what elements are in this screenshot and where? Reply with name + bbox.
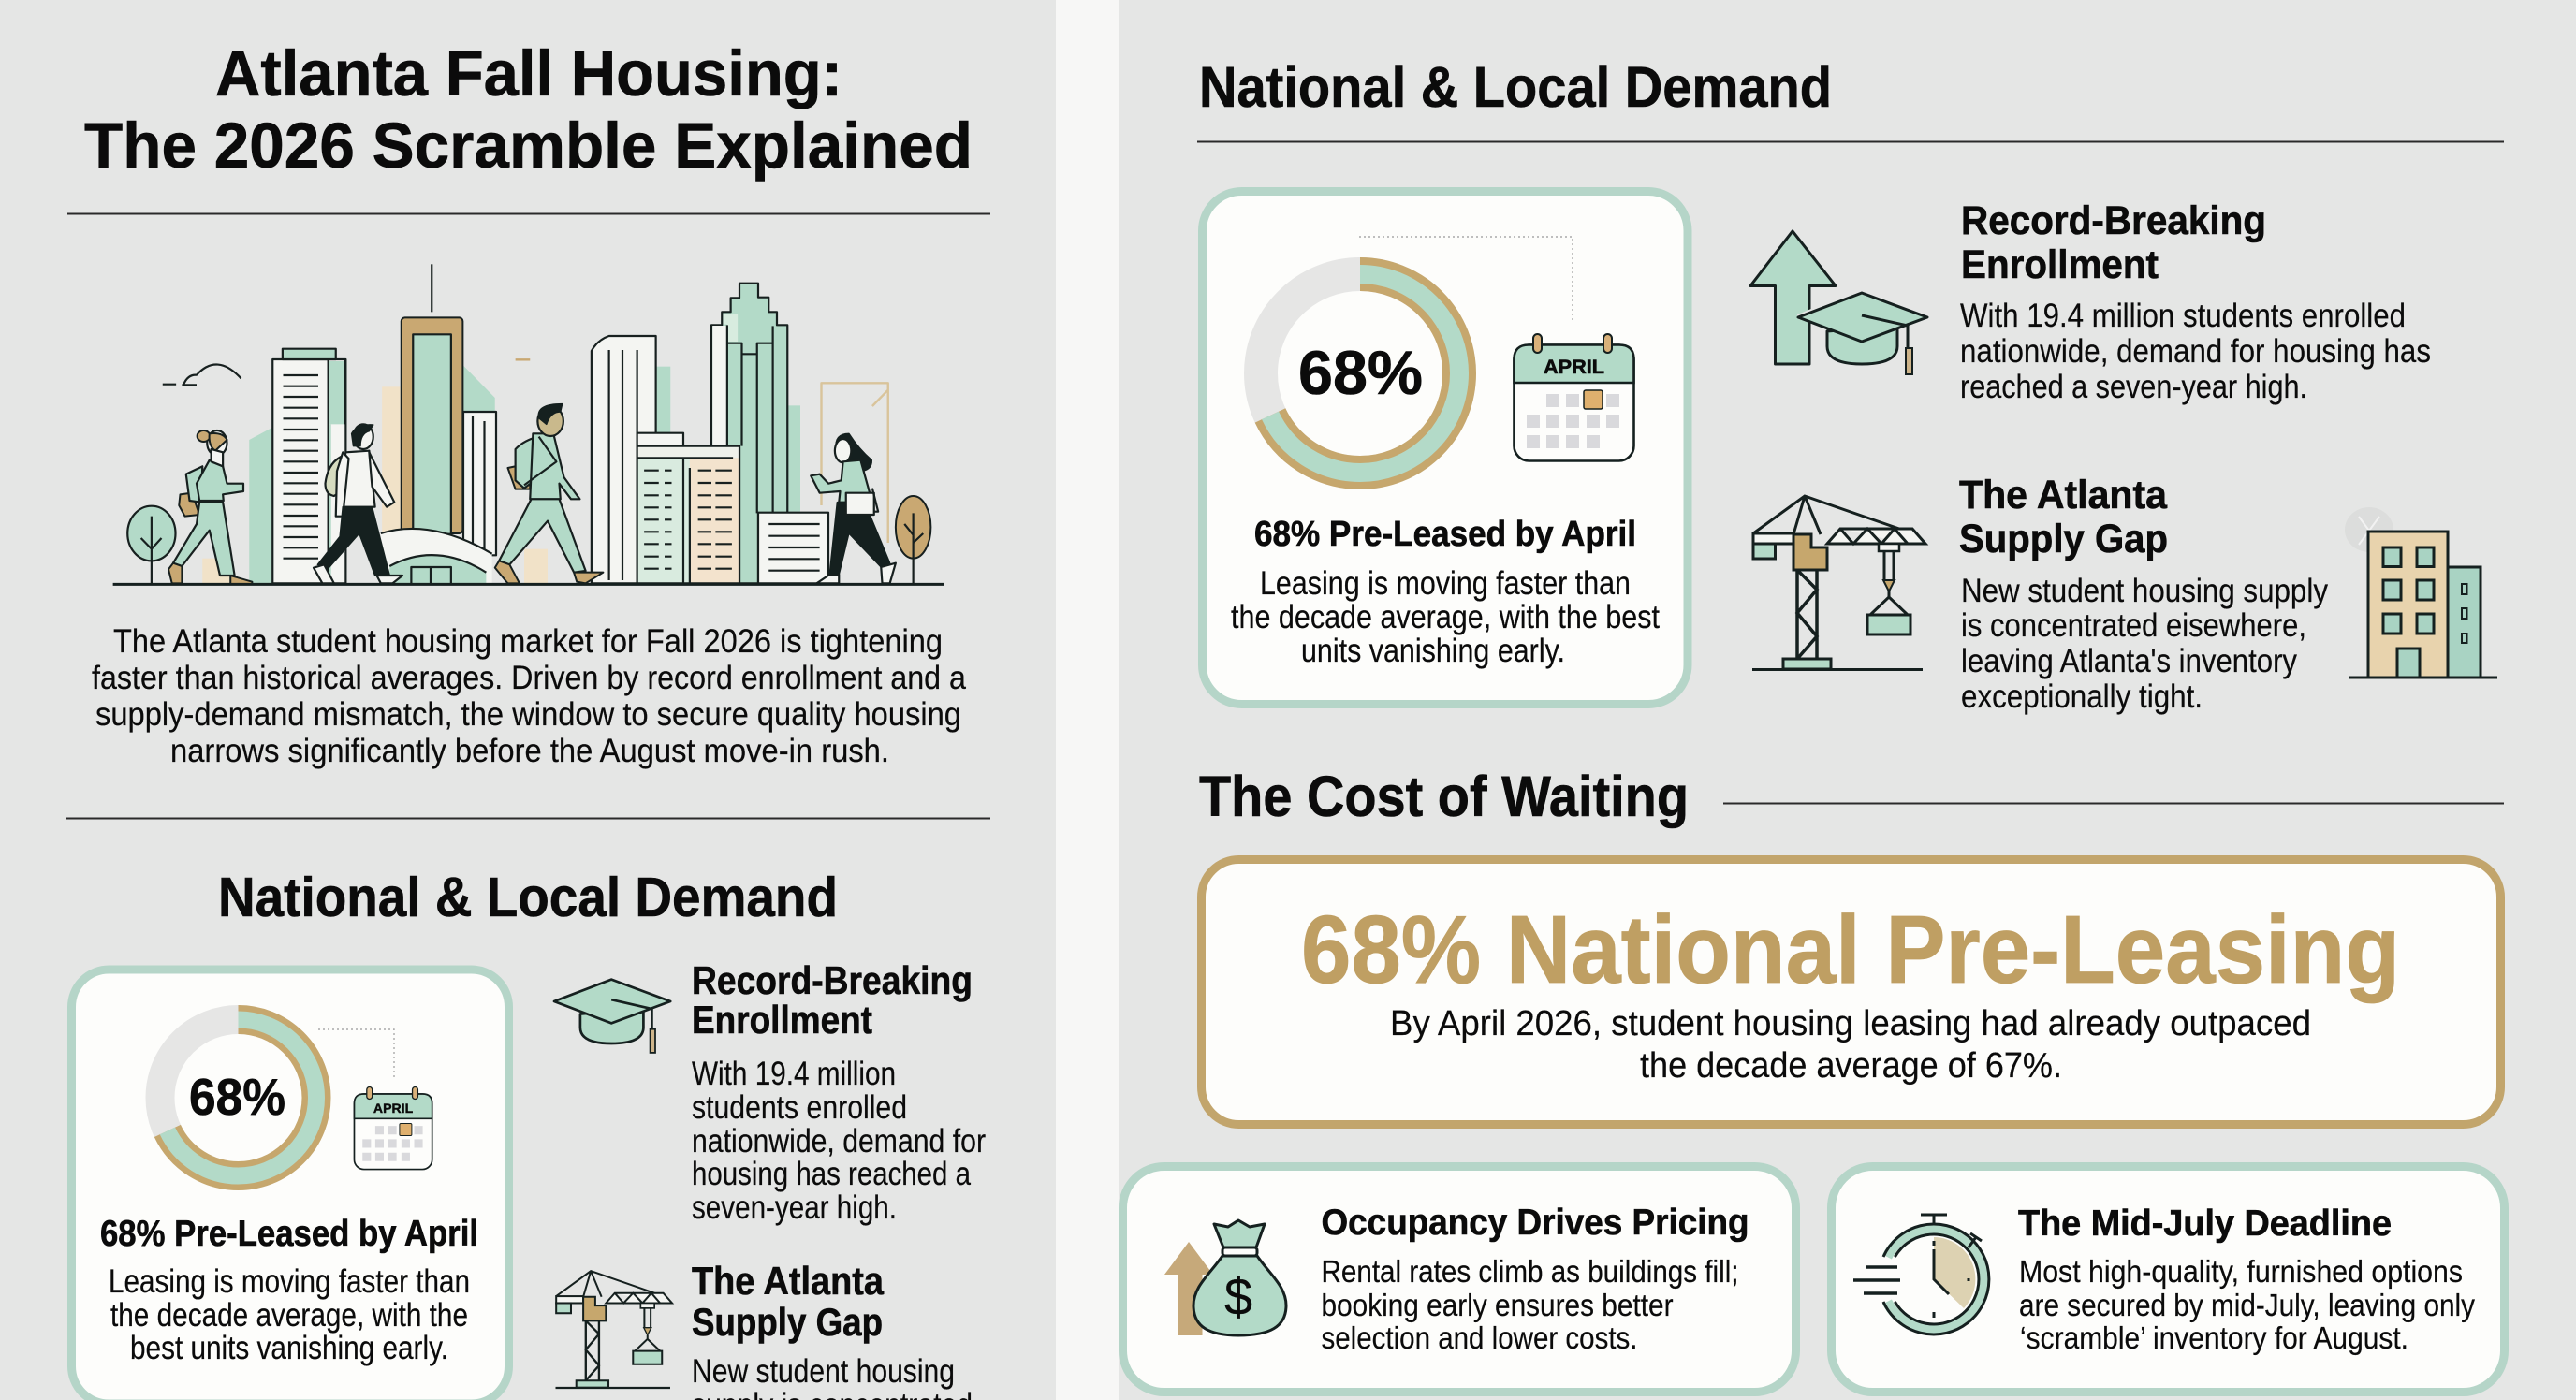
icon: April calendar [354,1087,432,1170]
heading: National & Local Demand: National & Local Demand [218,867,838,928]
callout: 68% national pre-leasing [1202,859,2501,1125]
text: Atlanta supply gap [692,1259,973,1400]
icon: April calendar: APRIL [1544,357,1604,378]
student 1 [168,430,252,584]
text: record-breaking enrollment [692,958,986,1226]
text: record-breaking enrollment: reached a seven-year high. [1960,369,2307,405]
heading: National & Local Demand: National & Local Demand [1199,55,1832,119]
text: record-breaking enrollment: nationwide, demand for [692,1123,986,1159]
student 4 [811,433,896,583]
panel: the mid-July deadline: Most high-quality, furnished options [2019,1254,2463,1289]
intro paragraph: The Atlanta student housing market for Fall 2026 is tightening [113,623,943,660]
callout: 68% national pre-leasing: the decade average of 67%. [1640,1046,2062,1086]
title: The 2026 Scramble Explained [84,109,973,182]
text: record-breaking enrollment [1960,198,2431,405]
card body [109,1263,470,1366]
panel: the mid-July deadline: ‘scramble’ inventory for August. [2020,1320,2408,1355]
tree right [896,496,930,583]
text: record-breaking enrollment: With 19.4 million students enrolled [1960,298,2406,334]
panel: the mid-July deadline: The Mid-July Deadline [2018,1203,2392,1244]
text: Atlanta supply gap: New student housing [692,1353,955,1390]
text: record-breaking enrollment: nationwide, demand for housing has [1960,333,2431,370]
intro paragraph [92,623,966,769]
panel: occupancy drives pricing [1123,1166,1795,1393]
text: Atlanta supply gap: Supply Gap [1959,517,2168,561]
text: Atlanta supply gap: exceptionally tight. [1961,678,2203,715]
callout: 68% national pre-leasing: By April 2026, student housing leasing had already outpaced [1390,1004,2311,1043]
panel: occupancy drives pricing: selection and lower costs. [1322,1320,1638,1355]
intro paragraph: faster than historical averages. Driven by record enrollment and a [92,660,966,696]
text: Atlanta supply gap: is concentrated eisewhere, [1961,607,2306,644]
icon: money bag with rising arrow: $ [1224,1267,1252,1326]
text: record-breaking enrollment: Enrollment [1961,242,2159,287]
student 3 [495,404,603,583]
panel: occupancy drives pricing: booking early ensures better [1322,1288,1674,1322]
heading: The Cost of Waiting: The Cost of Waiting [1199,765,1689,828]
text: Atlanta supply gap: leaving Atlanta's inventory [1961,643,2297,679]
panel: the mid-July deadline: are secured by mid-July, leaving only [2019,1288,2475,1322]
text: record-breaking enrollment: With 19.4 million [692,1056,896,1092]
text: Atlanta supply gap: The Atlanta [1959,473,2168,518]
icon: money bag with rising arrow [1164,1220,1286,1335]
icon: arrow up with graduation cap [1750,231,1927,374]
card body: Leasing is moving faster than [109,1263,470,1300]
title [84,37,973,182]
callout: 68% national pre-leasing: 68% National Pre-Leasing [1301,896,2400,1003]
text: record-breaking enrollment: Record-Breaking [1961,198,2266,243]
text: record-breaking enrollment: Record-Breaking [692,958,973,1002]
icon: April calendar [1515,334,1634,460]
icon: April calendar: APRIL [373,1101,413,1116]
text: record-breaking enrollment: housing has reached a [692,1156,971,1192]
intro paragraph: narrows significantly before the August move-in rush. [170,733,889,769]
donut chart: 68% [1261,274,1459,473]
tree left [127,506,176,583]
panel: occupancy drives pricing: Rental rates climb as buildings fill; [1322,1254,1739,1289]
panel: the mid-July deadline [1831,1166,2505,1393]
text: record-breaking enrollment: students enrolled [692,1089,907,1126]
donut chart: 68% [160,1020,316,1175]
text: record-breaking enrollment: Enrollment [692,998,872,1042]
card heading: 68% Pre-Leased by April [1254,515,1636,554]
icon: construction crane [556,1271,672,1388]
card body: the decade average, with the best [1231,599,1660,635]
panel: right page [1119,0,2576,1400]
icon: apartment building [2345,507,2497,678]
text: record-breaking enrollment: seven-year high. [692,1189,897,1226]
text: Atlanta supply gap: Supply Gap [692,1300,883,1344]
card heading: 68% Pre-Leased by April [100,1214,478,1254]
illustration: Atlanta skyline with walking students [113,264,944,584]
panel: left page [0,0,1056,1400]
title: Atlanta Fall Housing: [215,37,842,109]
text: Atlanta supply gap: The Atlanta [692,1259,885,1303]
card body [1231,565,1660,669]
panel: occupancy drives pricing: Occupancy Drives Pricing [1322,1203,1749,1243]
donut chart: 68%: 68% [1298,338,1423,407]
card body: Leasing is moving faster than [1260,565,1631,602]
student 2 [314,424,402,583]
text: Atlanta supply gap [1959,473,2328,715]
panel: 68% pre-leased card [71,970,509,1400]
icon: construction crane [1752,496,1925,670]
icon: graduation cap [554,980,670,1053]
card body: the decade average, with the [110,1297,468,1334]
card body: best units vanishing early. [130,1330,448,1366]
card body: units vanishing early. [1301,633,1565,669]
icon: stopwatch [1853,1215,1989,1334]
donut chart: 68%: 68% [189,1068,285,1126]
text: Atlanta supply gap: New student housing supply [1961,573,2328,609]
panel: 68% pre-leased card [1202,191,1688,704]
intro paragraph: supply-demand mismatch, the window to secure quality housing [95,696,961,733]
